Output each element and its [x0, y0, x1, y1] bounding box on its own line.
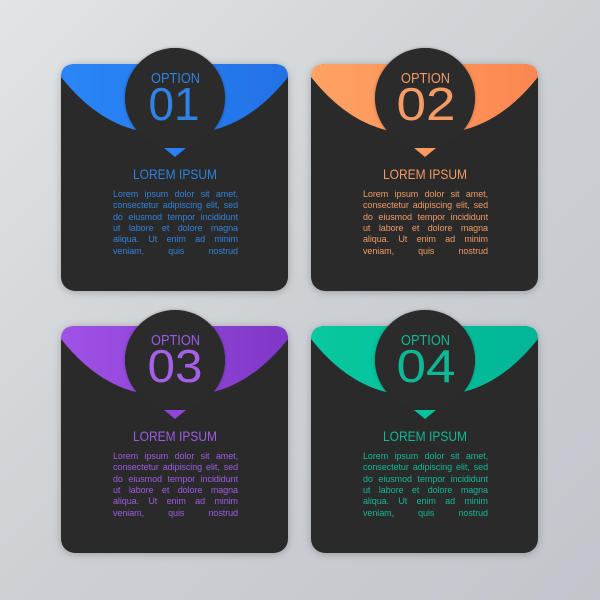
body text: veniam, quis nostrud [113, 246, 238, 256]
body text: ut labore et dolore magna [363, 223, 488, 233]
card body [61, 326, 288, 553]
option label: OPTION [401, 70, 450, 87]
pointer triangle [164, 410, 186, 419]
badge circle [123, 308, 226, 392]
body text [113, 451, 238, 518]
card body [311, 64, 538, 291]
option label: OPTION [151, 332, 200, 349]
number: 02 [396, 78, 456, 130]
colored header band [311, 326, 538, 392]
heading: LOREM IPSUM [133, 166, 217, 182]
option label: OPTION [151, 70, 200, 87]
body text: aliqua. Ut enim ad minim [363, 234, 488, 244]
body text: aliqua. Ut enim ad minim [113, 496, 238, 506]
card body [311, 326, 538, 553]
body text: veniam, quis nostrud [113, 508, 238, 518]
body text: Lorem ipsum dolor sit amet, [113, 451, 238, 461]
body text: do eiusmod tempor incididunt [113, 474, 238, 484]
body text: consectetur adipiscing elit, sed [363, 462, 488, 472]
heading: LOREM IPSUM [133, 428, 217, 444]
body text: Lorem ipsum dolor sit amet, [113, 189, 238, 199]
number: 04 [396, 340, 456, 392]
body text: veniam, quis nostrud [363, 246, 488, 256]
body text: consectetur adipiscing elit, sed [113, 200, 238, 210]
panel: option 1 [57, 46, 292, 296]
panel: option 4 [307, 308, 542, 558]
colored header band [311, 64, 538, 130]
panel: option 3 [57, 308, 292, 558]
colored header band [61, 64, 288, 130]
colored header band [61, 326, 288, 392]
body text: do eiusmod tempor incididunt [113, 212, 238, 222]
heading: LOREM IPSUM [383, 166, 467, 182]
body text: do eiusmod tempor incididunt [363, 212, 488, 222]
number: 03 [148, 340, 202, 392]
badge circle [374, 308, 476, 392]
body text: aliqua. Ut enim ad minim [113, 234, 238, 244]
body text: veniam, quis nostrud [363, 508, 488, 518]
body text: consectetur adipiscing elit, sed [363, 200, 488, 210]
pointer triangle [164, 148, 186, 157]
heading: LOREM IPSUM [383, 428, 467, 444]
number: 01 [148, 78, 200, 130]
body text [363, 189, 488, 256]
body text [113, 189, 238, 256]
pointer triangle [414, 410, 436, 419]
body text: aliqua. Ut enim ad minim [363, 496, 488, 506]
badge circle [373, 46, 477, 130]
body text: Lorem ipsum dolor sit amet, [363, 189, 488, 199]
body text: do eiusmod tempor incididunt [363, 474, 488, 484]
body text: Lorem ipsum dolor sit amet, [363, 451, 488, 461]
panel: option 2 [307, 46, 542, 296]
body text: ut labore et dolore magna [113, 485, 238, 495]
pointer triangle [414, 148, 436, 157]
body text: consectetur adipiscing elit, sed [113, 462, 238, 472]
card body [61, 64, 288, 291]
option label: OPTION [401, 332, 450, 349]
body text: ut labore et dolore magna [363, 485, 488, 495]
body text [363, 451, 488, 518]
badge circle [123, 46, 227, 130]
body text: ut labore et dolore magna [113, 223, 238, 233]
